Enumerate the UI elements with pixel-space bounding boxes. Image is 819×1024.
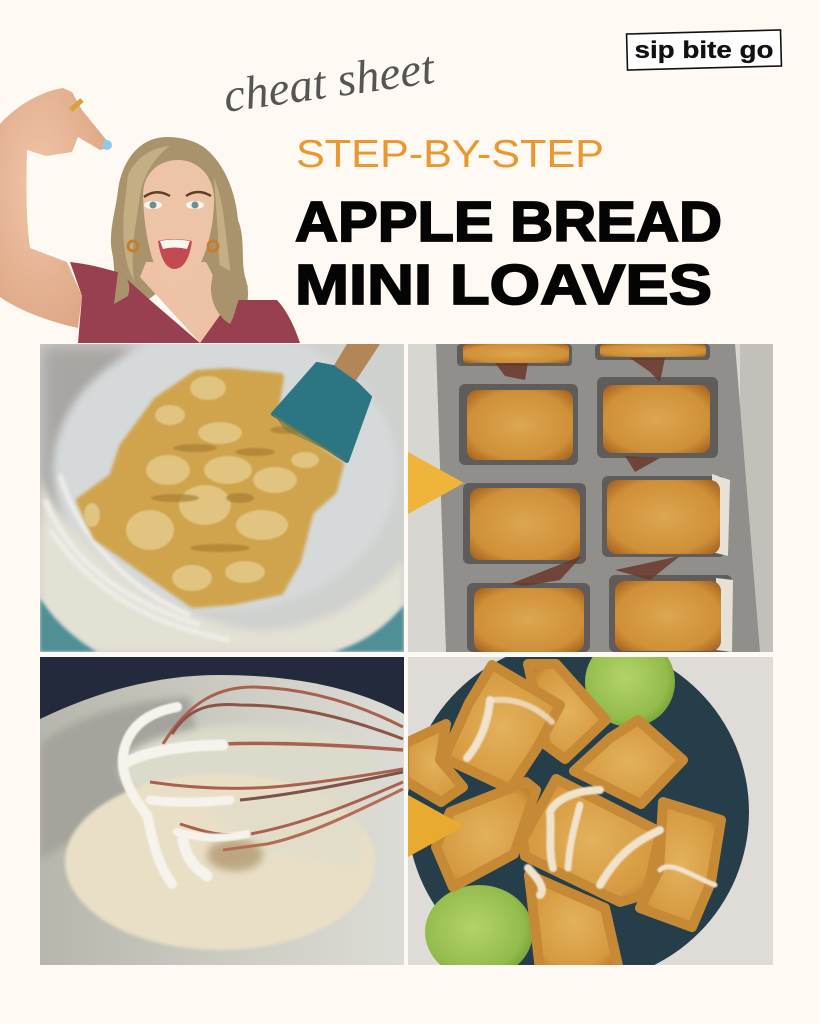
photo: glazed mini loaves on plate with apples — [408, 657, 773, 965]
title: MINI LOAVES — [295, 253, 712, 317]
title — [295, 190, 722, 317]
photo: apple batter in bowl — [40, 330, 404, 652]
photo: glaze and whisk — [40, 657, 404, 965]
hair over shoulder — [114, 262, 248, 324]
copper whisk wires — [150, 687, 403, 850]
subtitle: STEP-BY-STEP — [296, 133, 604, 176]
arrow: step 3 to step 4 — [408, 795, 464, 857]
neck and chest — [140, 262, 228, 343]
logo: sip bite go: sip bite go — [634, 37, 774, 64]
logo: sip bite go — [627, 30, 781, 70]
eyes — [144, 201, 162, 209]
photo: baked loaves in pan — [408, 344, 773, 652]
parchment edges — [712, 474, 733, 652]
apples — [585, 657, 675, 726]
eyebrows — [144, 192, 211, 197]
arm and fist — [0, 88, 112, 328]
glaze — [467, 700, 715, 895]
photo: woman pointing — [0, 88, 300, 343]
back hair — [111, 137, 248, 327]
face — [143, 160, 214, 287]
shirt — [70, 262, 300, 343]
script heading: cheat sheet: cheat sheet — [220, 42, 438, 123]
title: APPLE BREAD — [295, 190, 722, 254]
nail and ring — [102, 140, 112, 150]
earrings — [128, 241, 138, 251]
loaves — [404, 664, 721, 970]
glaze strands — [123, 707, 247, 884]
mouth — [158, 239, 192, 269]
arrow: step 1 to step 2 — [408, 452, 464, 514]
